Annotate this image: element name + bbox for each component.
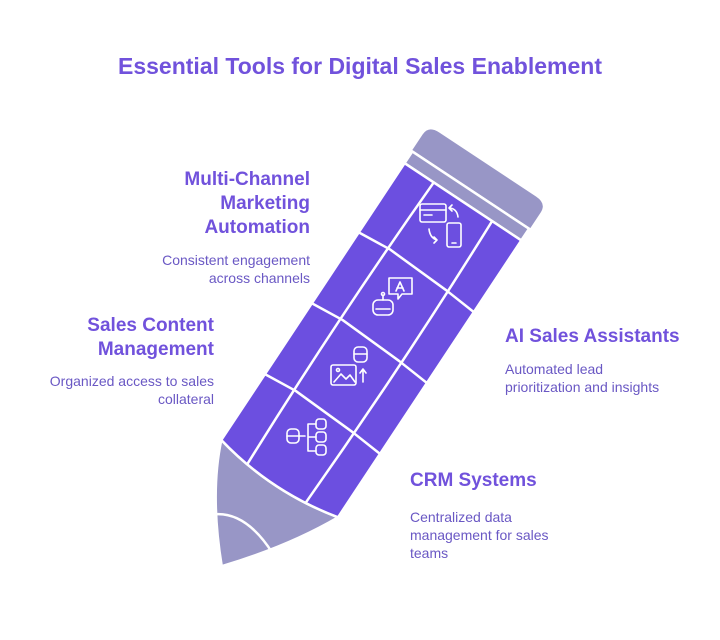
heading: sales content (87, 315, 214, 360)
tip (163, 440, 338, 605)
heading: sales content: Management (98, 339, 214, 360)
icon: crm (287, 419, 326, 455)
text: multi-channel: Consistent engagement (162, 252, 310, 268)
eraser (411, 124, 548, 230)
icon: ai (373, 278, 412, 315)
heading: sales content: Sales Content (87, 315, 214, 336)
body (217, 163, 521, 524)
text: sales content (50, 373, 214, 407)
heading: multi-channel: Multi-Channel (184, 169, 310, 190)
ferrule (405, 151, 529, 240)
heading: multi-channel: Automation (204, 217, 310, 238)
text: sales content: collateral (158, 391, 214, 407)
heading: crm: CRM Systems (410, 470, 537, 491)
text: ai assistants: Automated lead (505, 361, 603, 377)
text: crm: Centralized data (410, 509, 512, 525)
text: multi-channel (162, 252, 310, 286)
text: ai assistants: prioritization and insights (505, 379, 659, 395)
heading: ai assistants: AI Sales Assistants (505, 326, 680, 347)
text: crm: management for sales (410, 527, 549, 543)
heading: multi-channel (184, 169, 310, 238)
title: Essential Tools for Digital Sales Enablement (118, 53, 602, 79)
text: crm (410, 509, 549, 561)
icon: multi-channel (420, 204, 461, 247)
text: sales content: Organized access to sales (50, 373, 214, 389)
icon: content (331, 347, 367, 385)
heading: multi-channel: Marketing (220, 193, 310, 214)
text: multi-channel: across channels (209, 270, 310, 286)
text: crm: teams (410, 545, 448, 561)
text: ai assistants (505, 361, 659, 395)
